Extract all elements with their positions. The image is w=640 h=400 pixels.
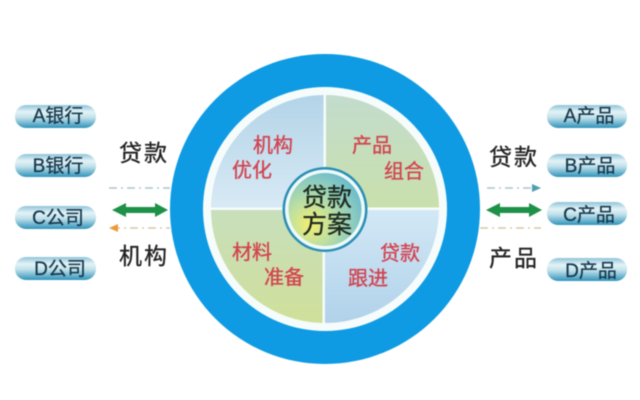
- center label: 贷款: [302, 184, 352, 212]
- heading: 贷款 left: 贷款: [119, 140, 169, 166]
- pill: A产品: [547, 105, 627, 128]
- pill: C公司: C公司: [32, 208, 84, 229]
- quadrant label: 产品组合: 产品: [352, 134, 392, 157]
- pill: C公司: [15, 206, 96, 229]
- quadrant label: 产品组合: [352, 134, 424, 183]
- right pills: products: [547, 105, 627, 282]
- quadrant label: 贷款跟进: 贷款: [380, 242, 420, 265]
- pill: C产品: C产品: [563, 204, 615, 226]
- arrow: right dashed teal: [487, 184, 541, 192]
- pill: B产品: B产品: [565, 155, 615, 177]
- quadrant label: 材料准备: 材料: [232, 241, 272, 264]
- quadrant label: 机构优化: 优化: [232, 159, 272, 182]
- heading: 机构 left: 机构: [119, 243, 169, 269]
- quadrant: top left: [211, 95, 324, 208]
- arrow: right green double: [486, 203, 542, 217]
- quadrant: top right: [326, 95, 439, 208]
- quadrant: bottom left: [211, 210, 322, 323]
- left pills: institutions: [15, 105, 96, 280]
- outer blue ring: [170, 54, 480, 364]
- inner white ring: [203, 87, 447, 331]
- pill: D公司: D公司: [34, 259, 86, 280]
- pill: B银行: B银行: [33, 155, 83, 177]
- quadrant label: 贷款跟进: [348, 242, 420, 290]
- pill: A银行: A银行: [33, 105, 83, 127]
- pill: B产品: [547, 154, 627, 177]
- pill: A银行: [15, 105, 96, 128]
- quadrant label: 材料准备: 准备: [264, 266, 304, 289]
- pill: D产品: [547, 258, 627, 282]
- pill: D公司: [15, 257, 96, 280]
- quadrant label: 材料准备: [232, 241, 304, 289]
- heading: 贷款 right: 贷款: [489, 144, 539, 170]
- quadrant label: 产品组合: 组合: [384, 160, 424, 183]
- arrow: left green double: [112, 203, 168, 217]
- center circle: 方案: [302, 211, 352, 239]
- quadrant: bottom right: [325, 210, 439, 323]
- quadrant label: 贷款跟进: 跟进: [348, 267, 388, 290]
- arrow: left dashed orange: [109, 224, 170, 232]
- pill: B银行: [15, 154, 96, 177]
- heading: 产品 right: 产品: [489, 245, 539, 271]
- arrow: right dashed orange: [480, 227, 541, 229]
- panel: quadrants: [211, 95, 439, 323]
- arrow: left dashed teal: [109, 187, 170, 189]
- pill: D产品: D产品: [565, 260, 617, 282]
- pill: C产品: [547, 202, 627, 226]
- quadrant label: 机构优化: [232, 134, 293, 182]
- pill: A产品: A产品: [564, 105, 614, 127]
- quadrant label: 机构优化: 机构: [253, 134, 293, 157]
- center circle: [282, 167, 368, 252]
